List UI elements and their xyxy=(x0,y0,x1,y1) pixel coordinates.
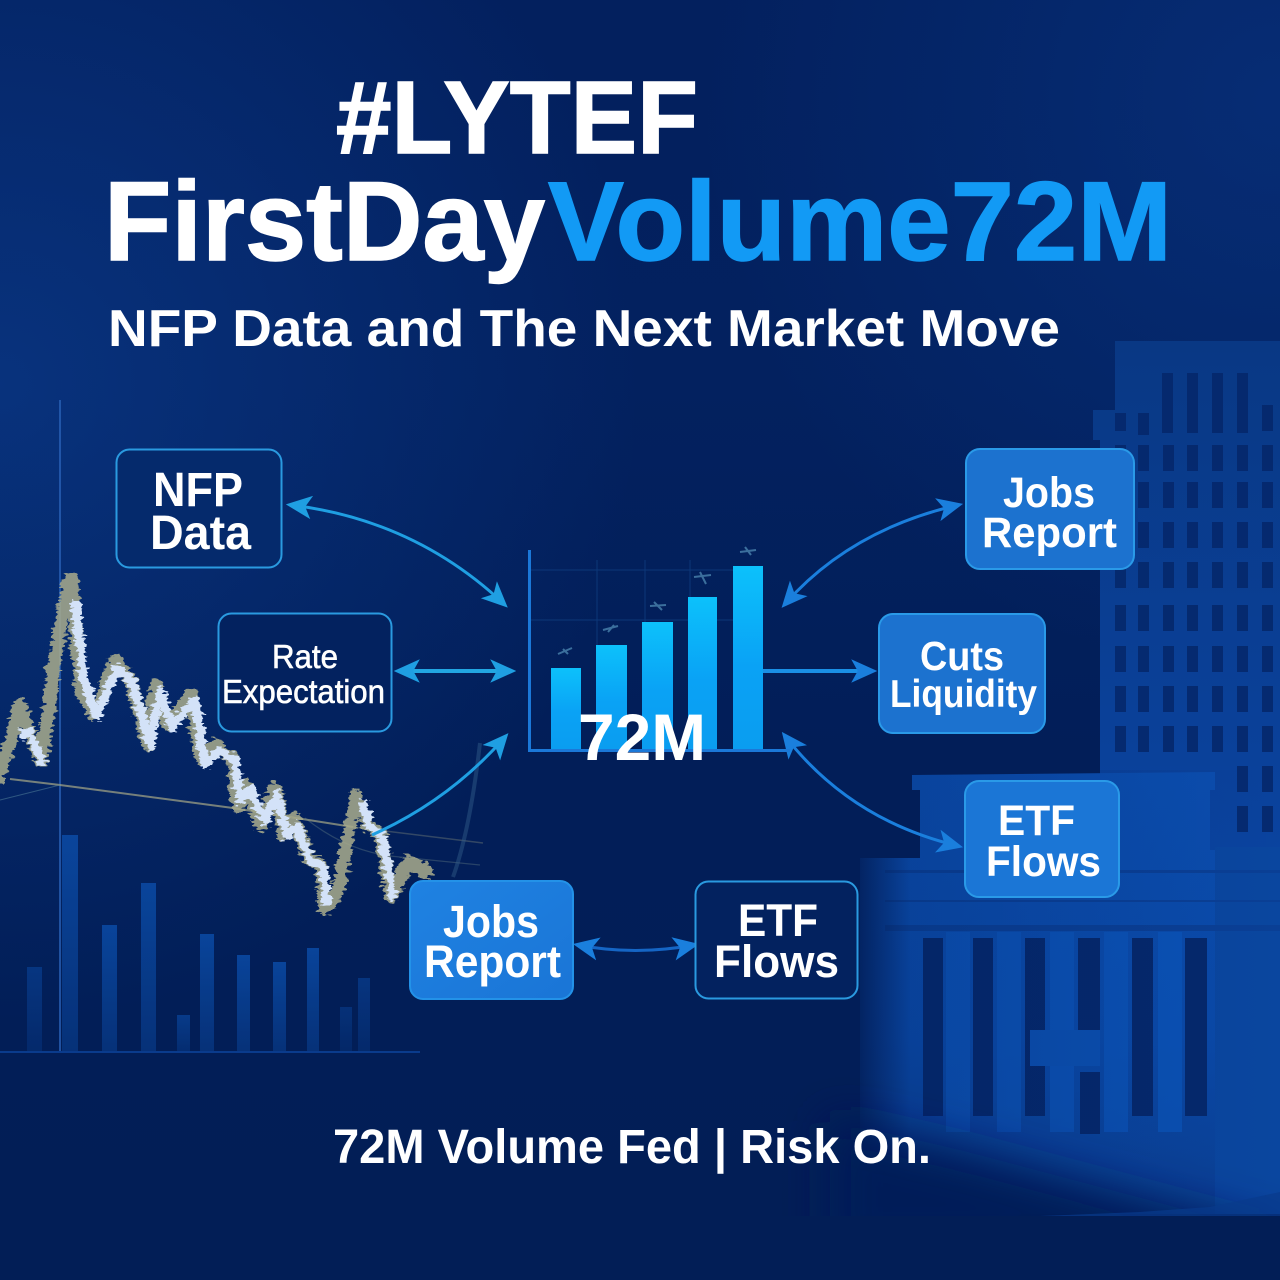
box: ETF Flows (bottom): Flows xyxy=(714,936,839,987)
arrow: ETF Flows right to chart xyxy=(785,736,958,846)
bars xyxy=(551,566,763,749)
box: NFP Data: Data xyxy=(150,507,251,560)
box: Cuts Liquidity: Cuts xyxy=(920,633,1004,679)
box: Jobs Report (right): Jobs xyxy=(1003,469,1095,517)
box: Jobs Report (left): Jobs xyxy=(443,896,539,947)
arrow: price line to chart xyxy=(372,737,505,835)
box: Cuts Liquidity: Liquidity xyxy=(890,673,1037,716)
box: ETF Flows (right): ETF xyxy=(998,797,1075,845)
background building: tower xyxy=(1093,341,1280,850)
footer tagline: 72M Volume Fed | Risk On. xyxy=(333,1121,931,1174)
box: Jobs Report (right): Report xyxy=(982,509,1117,557)
box: NFP Data xyxy=(116,450,282,568)
title xyxy=(104,60,1172,284)
background building: federal reserve facade xyxy=(0,770,1280,1280)
box: Rate Expectation xyxy=(218,614,392,732)
title line 2: white part: FirstDay xyxy=(104,159,545,284)
background chart: price line xyxy=(0,578,431,908)
box: Cuts Liquidity xyxy=(879,614,1045,733)
background chart: axis and trend lines xyxy=(0,400,483,1052)
box: ETF Flows (right): Flows xyxy=(986,838,1101,886)
title line 1: hashtag: #LYTEF xyxy=(336,60,698,175)
arrow: Jobs Report to ETF Flows xyxy=(578,945,694,950)
facade frieze bands xyxy=(885,870,1280,931)
box: Jobs Report (left): Report xyxy=(424,936,561,987)
box: ETF Flows (right) xyxy=(965,781,1119,897)
facade column highlights xyxy=(946,932,1182,1132)
box: Rate Expectation: Rate xyxy=(272,638,338,675)
arrow: chart to Cuts Liquidity xyxy=(763,669,872,673)
facade window gaps xyxy=(923,938,1207,1134)
arrow: Rate Expectation to chart xyxy=(399,669,511,673)
box: NFP Data: NFP xyxy=(153,464,243,517)
box: ETF Flows (bottom): ETF xyxy=(738,895,818,946)
box: Jobs Report (right) xyxy=(966,449,1134,569)
arrow: NFP Data to chart xyxy=(291,505,504,604)
small bird marks xyxy=(558,547,756,654)
chart value: 72M xyxy=(578,700,706,774)
axes xyxy=(530,550,790,750)
background chart: volume bars xyxy=(27,835,370,1052)
arrow: Jobs Report right to chart xyxy=(785,505,958,604)
box: Rate Expectation: Expectation xyxy=(222,673,385,710)
box: ETF Flows (bottom) xyxy=(696,882,858,998)
box: Jobs Report (left) xyxy=(410,881,573,999)
subtitle: NFP Data and The Next Market Move xyxy=(108,300,1060,358)
title line 2: blue part: Volume72M xyxy=(548,159,1172,284)
central bar chart xyxy=(530,547,790,774)
